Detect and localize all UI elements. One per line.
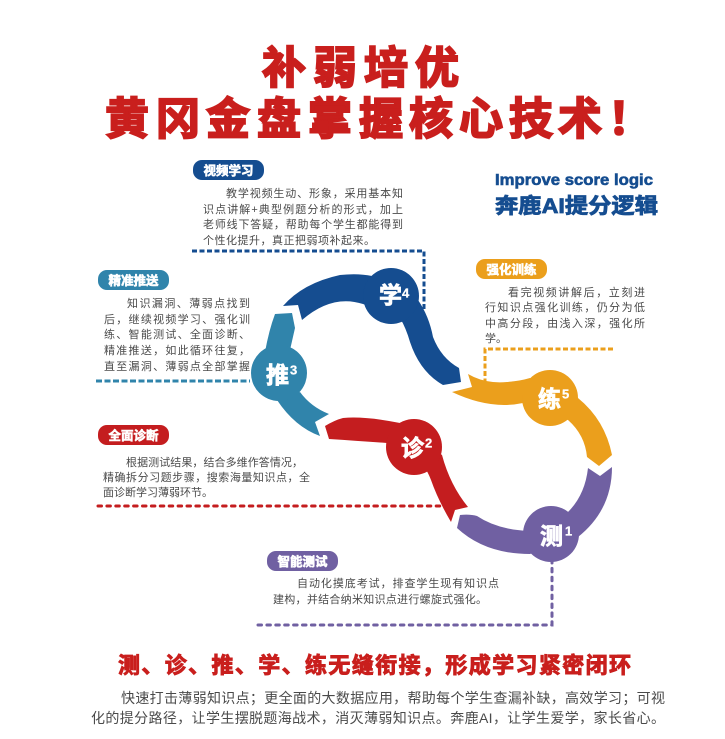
summary paragraph: 化的提分路径，让学生摆脱题海战术，消灭薄弱知识点。奔鹿AI，让学生爱学，家长省心。 [91, 710, 665, 726]
connector: video learning [192, 251, 424, 310]
step: learn: 学 [379, 282, 402, 308]
step: push: 3 [290, 362, 297, 378]
step: practice: 5 [562, 386, 569, 402]
connector: full diagnosis [98, 504, 440, 508]
step: diagnose: 2 [425, 436, 432, 450]
pill: intensive training: 强化训练 [486, 262, 537, 277]
summary paragraph [91, 690, 665, 726]
step: diagnose [325, 418, 468, 522]
text: video learning: 老师线下答疑，帮助每个学生都能得到 [203, 217, 403, 231]
text: video learning: 教学视频生动、形象，采用基本知 [226, 186, 403, 200]
subtitle: improve score logic [495, 172, 658, 218]
connector: precise push [96, 380, 250, 382]
step: diagnose: 诊 [401, 435, 425, 461]
text: intensive training: 看完视频讲解后，立刻进 [508, 285, 645, 299]
pill: video learning: 视频学习 [203, 163, 254, 178]
connector: smart test [258, 560, 552, 625]
pill: full diagnosis: 全面诊断 [108, 428, 159, 443]
text: full diagnosis [103, 455, 310, 499]
step: push [251, 313, 329, 436]
step: test [457, 467, 612, 562]
text: full diagnosis: 根据测试结果，结合多维作答情况， [126, 455, 303, 469]
panel: full diagnosis [98, 425, 440, 506]
pill: smart test: 智能测试 [277, 554, 328, 569]
pill: precise push [98, 270, 169, 290]
cycle diagram [251, 268, 612, 562]
pill: full diagnosis [98, 425, 169, 445]
title: 补弱培优 [262, 44, 459, 93]
step: practice [452, 370, 612, 466]
step: test: 测 [540, 523, 563, 549]
pill: video learning [193, 160, 264, 180]
text: intensive training: 行知识点强化训练，仍分为低 [485, 300, 645, 314]
pill: precise push: 精准推送 [108, 273, 159, 288]
panel: precise push [96, 270, 250, 381]
connector: intensive training [485, 349, 613, 382]
text: precise push: 直至漏洞、薄弱点全部掌握 [104, 359, 250, 373]
text: intensive training: 学。 [485, 331, 507, 345]
panel: video learning [192, 160, 424, 310]
step: learn: 4 [402, 286, 410, 300]
title: 黄冈金盘掌握核心技术！ [105, 95, 652, 144]
text: intensive training [485, 285, 645, 345]
text: full diagnosis: 面诊断学习薄弱环节。 [103, 485, 213, 499]
summary paragraph: 快速打击薄弱知识点；更全面的大数据应用，帮助每个学生查漏补缺，高效学习；可视 [121, 690, 665, 707]
panel: smart test [258, 551, 552, 625]
summary heading: 测、诊、推、学、练无缝衔接，形成学习紧密闭环 [118, 653, 631, 678]
text: precise push: 练、智能测试、全面诊断、 [104, 327, 250, 341]
step: test: 1 [565, 524, 572, 538]
panel: intensive training [476, 259, 645, 382]
subtitle: improve score logic: Improve score logic [495, 172, 653, 189]
pill: intensive training [476, 259, 547, 279]
text: smart test [273, 576, 499, 606]
text: smart test: 建构，并结合纳米知识点进行螺旋式强化。 [273, 592, 487, 606]
text: smart test: 自动化摸底考试，排查学生现有知识点 [297, 576, 499, 590]
text: video learning: 个性化提升，真正把弱项补起来。 [203, 233, 375, 247]
step: practice: 练 [538, 386, 561, 412]
step: learn [283, 268, 461, 385]
title [105, 44, 652, 144]
step: push: 推 [266, 362, 289, 388]
subtitle: improve score logic: 奔鹿AI提分逻辑 [495, 194, 658, 218]
text: video learning: 识点讲解+典型例题分析的形式，加上 [203, 202, 403, 216]
text: precise push [104, 296, 250, 373]
text: precise push: 精准推送，如此循环往复， [104, 343, 250, 357]
text: intensive training: 中高分段，由浅入深，强化所 [485, 316, 645, 330]
text: precise push: 后，继续视频学习、强化训 [104, 312, 250, 326]
text: precise push: 知识漏洞、薄弱点找到 [127, 296, 250, 310]
text: full diagnosis: 精确拆分习题步骤，搜索海量知识点，全 [103, 470, 310, 484]
pill: smart test [267, 551, 338, 571]
text: video learning [203, 186, 403, 247]
